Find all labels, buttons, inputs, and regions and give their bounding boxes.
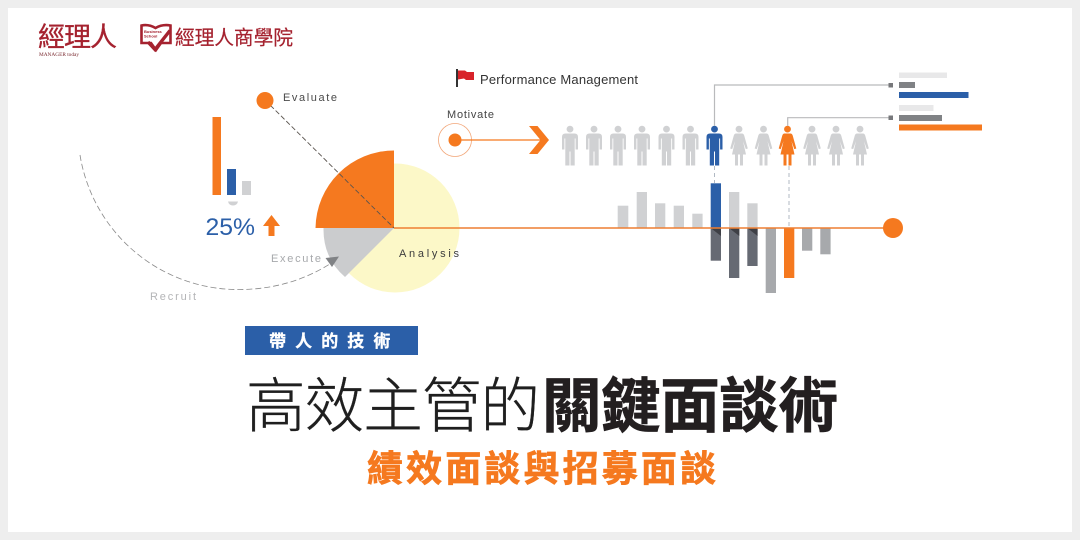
label: execute: Execute	[271, 253, 321, 265]
dashed drop lines	[714, 166, 789, 228]
icon: chevron	[529, 126, 549, 154]
motivate marker with arrow: Motivate	[447, 109, 494, 121]
label: analysis: Analysis	[399, 248, 460, 260]
stat: 25 percent up: 25%	[206, 214, 255, 241]
label: recruit: Recruit	[150, 291, 196, 303]
connector: blue person to bars	[714, 83, 893, 126]
connector: orange person to bars	[788, 116, 893, 126]
orange axis line with end dot	[394, 218, 903, 238]
comparison bars	[899, 72, 982, 130]
diverging bar chart	[618, 183, 831, 293]
people row	[562, 126, 869, 166]
tag: course series	[245, 326, 418, 355]
icon: flag	[456, 69, 474, 87]
main title: 關鍵面談術	[542, 373, 838, 440]
icon: book with check mark: School	[144, 34, 157, 38]
logo: manager today: 經理人	[38, 16, 117, 54]
evaluate marker	[256, 92, 337, 109]
evaluate marker: Evaluate	[283, 92, 337, 104]
main title: 高效主管的	[246, 373, 540, 440]
small bar chart	[212, 117, 251, 206]
arc arrowhead	[326, 256, 339, 267]
recruit dashed arc	[80, 155, 333, 290]
motivate marker with arrow	[438, 109, 549, 156]
stat: 25 percent up	[206, 214, 280, 241]
tag: course series: 帶人的技術	[269, 332, 400, 351]
main title	[246, 373, 838, 440]
icon: book with check mark	[142, 25, 170, 50]
pie chart	[316, 150, 460, 292]
icon: up arrow	[263, 215, 280, 236]
subtitle: 績效面談與招募面談	[367, 448, 716, 489]
dashed leader: evaluate to pie	[265, 100, 394, 228]
logo: business school: 經理人商學院	[175, 22, 293, 50]
logo: manager today: MANAGER today	[39, 52, 79, 58]
performance management heading: Performance Management	[480, 72, 638, 87]
icon: book with check mark: Business	[144, 29, 163, 34]
